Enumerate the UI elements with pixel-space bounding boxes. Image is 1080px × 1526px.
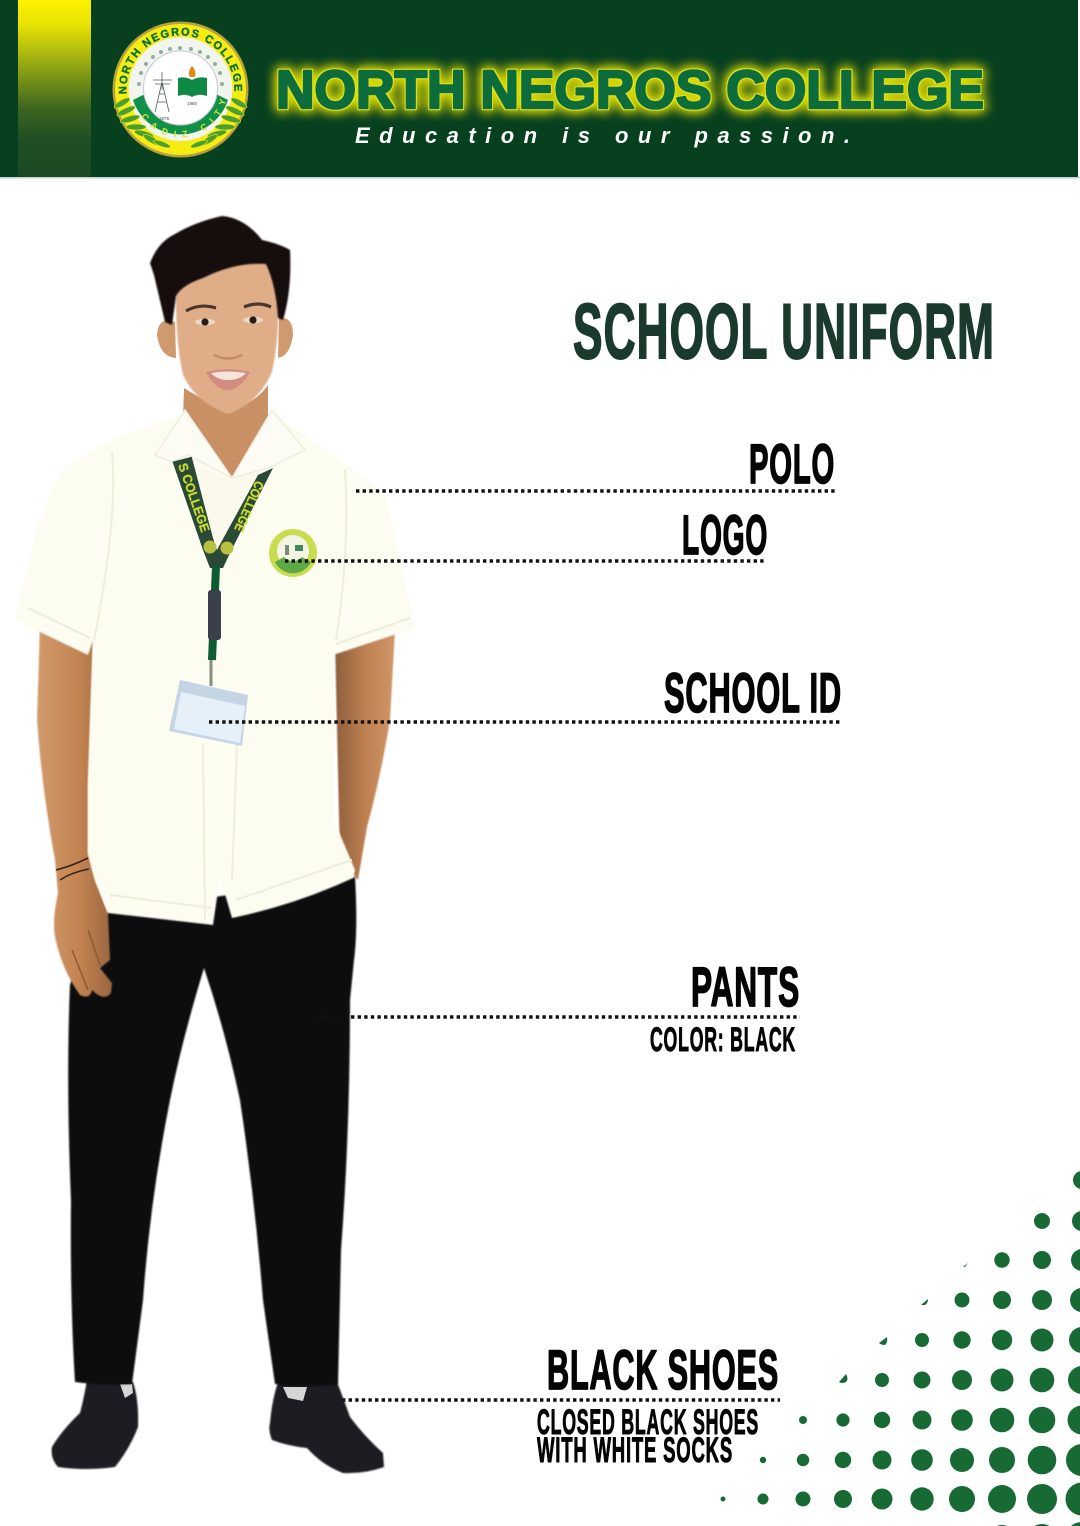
logo tower icon	[153, 72, 172, 112]
tagline: Education is our passion.	[355, 123, 850, 148]
callout: logo: LOGO	[682, 503, 768, 566]
logo book and flame icon: 1979	[159, 116, 170, 121]
callout: black shoes: WITH WHITE SOCKS	[537, 1431, 733, 1470]
shirt folds and placket	[28, 452, 410, 920]
fingers	[72, 930, 100, 990]
smiling mouth	[206, 369, 250, 390]
lanyard cord and buckle	[208, 566, 221, 686]
school ID holder	[169, 680, 248, 746]
left shoe	[52, 1380, 138, 1469]
callout: pants: COLOR: BLACK	[650, 1021, 796, 1059]
college name: NORTH NEGROS COLLEGE	[276, 60, 984, 120]
callout: black shoes: BLACK SHOES	[547, 1338, 779, 1401]
callout: polo: POLO	[749, 432, 835, 495]
left arm and hand	[37, 625, 112, 997]
logo ring text: NORTH NEGROS COLLEGE	[118, 28, 242, 94]
embroidered shirt logo	[269, 529, 317, 577]
hair	[150, 216, 290, 325]
callout: school id: SCHOOL ID	[664, 661, 842, 724]
logo book and flame icon: 1980	[187, 101, 198, 106]
logo book and flame icon	[159, 66, 207, 121]
right shoe	[269, 1382, 384, 1473]
wrist bands	[56, 858, 89, 880]
logo laurel wreath	[113, 96, 248, 150]
white socks	[120, 1384, 307, 1401]
ears	[157, 318, 293, 358]
header banner	[0, 0, 1080, 178]
nose	[214, 355, 242, 358]
neck	[183, 385, 268, 480]
shirt collar	[155, 410, 305, 478]
lanyard left strap	[172, 457, 223, 568]
callout: pants	[318, 955, 800, 1059]
student figure wearing the uniform	[15, 216, 415, 1473]
polo shirt	[15, 412, 415, 925]
callout: pants: PANTS	[691, 955, 800, 1018]
yellow gradient band	[18, 0, 91, 177]
eyebrows	[186, 304, 271, 311]
front collar stand	[191, 465, 258, 560]
lanyard right strap	[210, 468, 273, 568]
right arm	[335, 630, 395, 880]
college logo seal	[112, 22, 248, 158]
callout: black shoes	[342, 1338, 780, 1470]
black pants	[68, 877, 356, 1386]
face	[176, 258, 278, 414]
lanyard text right: COLLEGE	[231, 479, 267, 534]
eyes	[195, 316, 263, 326]
lanyard text left: S COLLEGE	[175, 461, 213, 534]
halftone dot pattern	[720, 1171, 1080, 1526]
logo city text: CADIZ CITY	[142, 98, 226, 138]
callout: black shoes: CLOSED BLACK SHOES	[537, 1403, 759, 1442]
lanyard strap logos	[204, 540, 234, 554]
